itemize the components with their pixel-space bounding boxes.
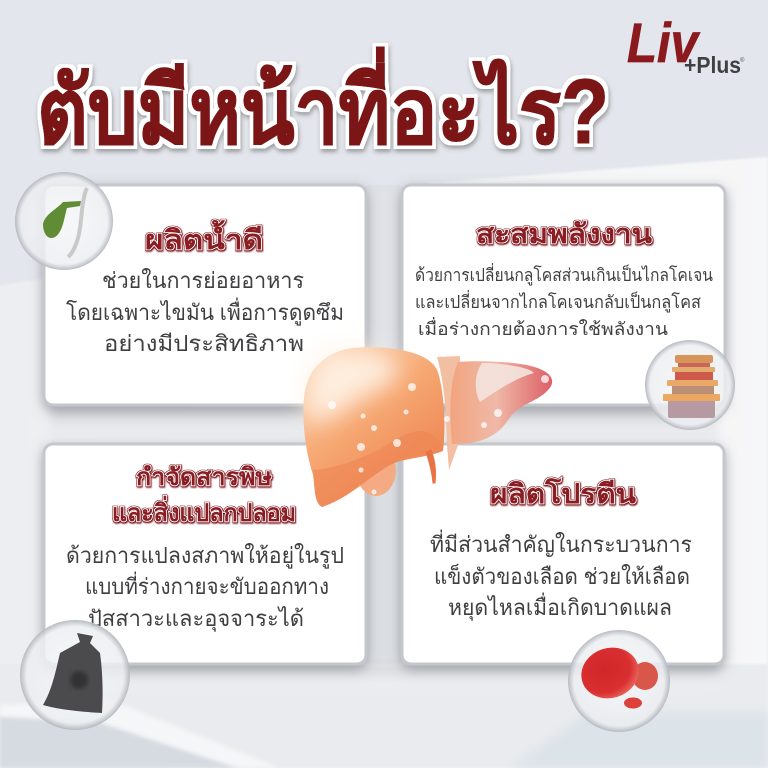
heading: produce protein: ผลิตโปรตีน	[490, 477, 637, 509]
body text: store energy	[415, 263, 713, 339]
body text: store energy: ด้วยการเปลี่ยนกลูโคสส่วนเกินเป็นไกลโคเจน	[415, 263, 713, 286]
body text: eliminate toxins: ปัสสาวะและอุจจาระได้	[88, 606, 304, 632]
heading: eliminate toxins: และสิ่งแปลกปลอม	[112, 495, 296, 527]
heading: eliminate toxins	[112, 464, 296, 527]
body text: produce bile: ช่วยในการย่อยอาหาร	[102, 268, 304, 293]
vessels	[426, 450, 436, 483]
heading: store energy: สะสมพลังงาน	[476, 219, 653, 249]
panel: produce bile	[44, 185, 366, 405]
logo: Liv Plus	[627, 11, 745, 78]
heading: produce bile: ผลิตน้ำดี	[145, 219, 263, 255]
ligament	[437, 356, 460, 470]
icon: garbage bag	[20, 620, 130, 730]
icon: liver	[303, 347, 552, 507]
icon: red blood cells	[568, 630, 670, 732]
right lobe	[450, 361, 552, 444]
body text: store energy: เมื่อร่างกายต้องการใช้พลังงาน	[418, 317, 668, 339]
body text: produce bile	[66, 268, 344, 356]
panel: produce protein	[402, 444, 724, 664]
panel: eliminate toxins	[44, 444, 366, 664]
body text: produce protein: หยุดไหลเมื่อเกิดบาดแผล	[448, 592, 672, 621]
body text: produce protein: แข็งตัวของเลือด ช่วยให้เลือด	[434, 562, 690, 589]
body text: produce bile: อย่างมีประสิทธิภาพ	[104, 331, 304, 356]
left lobe	[303, 347, 444, 507]
body text: produce protein	[430, 529, 692, 621]
icon: food containers	[645, 340, 735, 430]
body text: eliminate toxins: ด้วยการแปลงสภาพให้อยู่ในรูป	[66, 543, 344, 569]
heading: eliminate toxins: กำจัดสารพิษ	[136, 464, 272, 491]
body text: store energy: และเปลี่ยนจากไกลโคเจนกลับเป็นกลูโคส	[415, 290, 701, 313]
sparkles	[328, 375, 549, 494]
body text: eliminate toxins: แบบที่ร่างกายจะขับออกทาง	[85, 571, 329, 599]
gallbladder bump	[356, 444, 396, 496]
icon: gallbladder	[15, 172, 113, 270]
logo: Liv Plus: ®	[740, 57, 745, 64]
panel: store energy	[402, 185, 725, 405]
logo: Liv Plus: +Plus	[684, 52, 741, 78]
body text: produce protein: ที่มีส่วนสำคัญในกระบวนการ	[430, 529, 692, 557]
body text: eliminate toxins	[66, 543, 344, 632]
title: ตับมีหน้าที่อะไร?	[37, 46, 609, 163]
logo: Liv Plus: Liv	[627, 11, 700, 74]
body text: produce bile: โดยเฉพาะไขมัน เพื่อการดูดซึม	[66, 297, 344, 326]
